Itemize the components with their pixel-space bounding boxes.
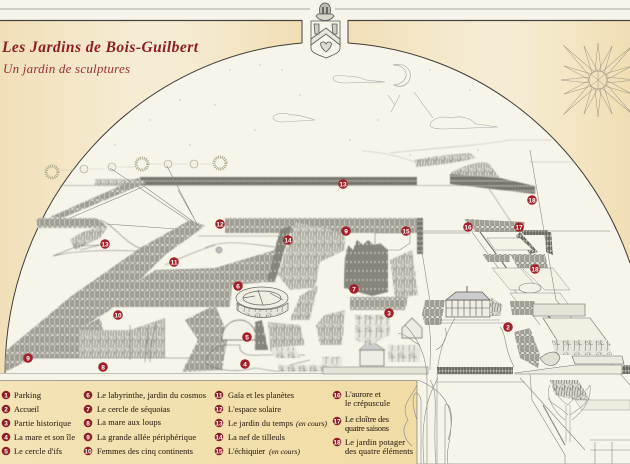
legend column 1: 2 — [4, 406, 8, 414]
legend column 4: quatre saisons — [345, 424, 389, 433]
legend column 2: La grande allée périphérique — [97, 433, 196, 442]
legend column 1: 3 — [4, 420, 8, 428]
legend column 3: L'espace solaire — [228, 405, 281, 414]
legend column 2: 10 — [84, 448, 92, 456]
legend column 1: La mare et son île — [14, 433, 75, 442]
legend column 3: Gaïa et les planètes — [228, 391, 294, 400]
legend column 3: (en cours) — [269, 447, 300, 456]
big tree foreground — [398, 318, 455, 464]
map markers: 5 — [245, 334, 249, 342]
map markers: 8 — [101, 364, 105, 372]
legend column 3: (en cours) — [296, 419, 328, 428]
garden of the seasons: hedge and cloister — [423, 150, 630, 385]
legend column 4: 18 — [333, 440, 341, 446]
map markers: 9 — [344, 228, 348, 236]
legend column 1: Parking — [14, 391, 41, 400]
icon: crescent moon — [393, 64, 410, 86]
legend column 2: Le cercle de séquoias — [97, 405, 170, 414]
mare and circle of yews — [205, 285, 330, 372]
chateau — [422, 286, 505, 325]
legend column 1 — [2, 391, 75, 456]
legend column 1: 1 — [4, 392, 8, 400]
fences along road — [0, 327, 525, 382]
icon: clouds — [273, 75, 498, 129]
legend column 2: 7 — [86, 406, 90, 414]
horizon hedge — [60, 174, 535, 222]
chequerboard lawn — [375, 233, 470, 320]
map markers: 14 — [284, 238, 292, 244]
legend column 3: La nef de tilleuls — [228, 433, 285, 442]
map markers: 18 — [531, 266, 539, 274]
map markers: 17 — [515, 224, 523, 232]
legend column 3 — [215, 391, 328, 456]
map markers: 13 — [101, 242, 109, 248]
legend column 3: Le jardin du temps — [228, 419, 293, 428]
map markers — [23, 179, 540, 372]
lower tree row — [15, 305, 228, 372]
tree lower right — [417, 380, 630, 464]
panel: arch frame with tan corners — [0, 20, 630, 373]
legend column 2 — [84, 391, 206, 456]
map markers: 7 — [352, 286, 356, 294]
title: Les Jardins de Bois-Guilbert — [1, 39, 199, 56]
map markers: 2 — [506, 324, 510, 332]
top rule — [0, 8, 630, 10]
legend column 4: Le cloître des — [345, 415, 389, 424]
hedge row: solar space and allee — [165, 218, 423, 265]
legend column 2: Le labyrinthe, jardin du cosmos — [97, 391, 206, 400]
map markers: 10 — [114, 312, 122, 320]
nave of lime trees — [266, 222, 345, 290]
legend column 1: Le cercle d'ifs — [14, 447, 62, 456]
legend column 4: Le jardin potager — [345, 438, 405, 447]
kitchen garden buildings — [510, 301, 630, 464]
suns and planets on horizon — [46, 157, 226, 178]
map markers: 9 — [26, 356, 30, 362]
legend column 3: 13 — [215, 420, 223, 428]
legend column 2: 8 — [86, 420, 90, 428]
legend column 1: 5 — [4, 448, 8, 456]
house and trees near wolves' pond — [316, 310, 422, 366]
legend panel — [0, 380, 417, 464]
circle of sequoias — [344, 240, 418, 310]
stars in sky — [114, 64, 479, 156]
labyrinth ring — [236, 287, 288, 318]
map markers: 16 — [464, 224, 472, 232]
map markers: 3 — [387, 310, 391, 318]
legend column 3: 14 — [215, 434, 223, 442]
legend column 4: le crépuscule — [345, 399, 390, 408]
inner tree lines — [110, 250, 275, 307]
legend column 1: Accueil — [14, 405, 40, 414]
legend column 4 — [333, 390, 413, 456]
legend column 3: 15 — [215, 448, 223, 456]
legend column 4: 16 — [333, 392, 341, 400]
icon: coat of arms — [311, 3, 340, 58]
legend column 2: La mare aux loups — [97, 418, 161, 427]
long peripheral hedge — [5, 220, 205, 372]
legend column 4: des quatre éléments — [345, 447, 413, 456]
legend column 1: 4 — [4, 434, 8, 442]
map markers: 12 — [216, 222, 224, 228]
garden 13 upper alley — [37, 178, 160, 256]
legend column 3: L'échiquier — [228, 447, 265, 456]
legend column 4: L'aurore et — [345, 390, 382, 399]
legend column 3: 11 — [216, 392, 223, 400]
legend column 3: 12 — [215, 406, 223, 414]
map markers: 15 — [402, 228, 410, 236]
icon: compass star sun — [561, 43, 630, 117]
hills and distant groves — [362, 140, 575, 178]
subtitle: Un jardin de sculptures — [3, 61, 130, 76]
legend column 4: 17 — [333, 418, 341, 426]
map markers: 18 — [528, 198, 536, 204]
map markers: 11 — [171, 260, 178, 266]
sun rays lines — [70, 166, 197, 230]
map markers: 4 — [243, 362, 247, 368]
legend column 1: Partie historique — [14, 419, 71, 428]
legend column 2: Femmes des cinq continents — [97, 447, 193, 456]
map markers: 13 — [339, 182, 347, 188]
legend column 2: 6 — [86, 392, 90, 400]
map markers: 6 — [236, 284, 240, 290]
legend column 2: 9 — [86, 434, 90, 442]
